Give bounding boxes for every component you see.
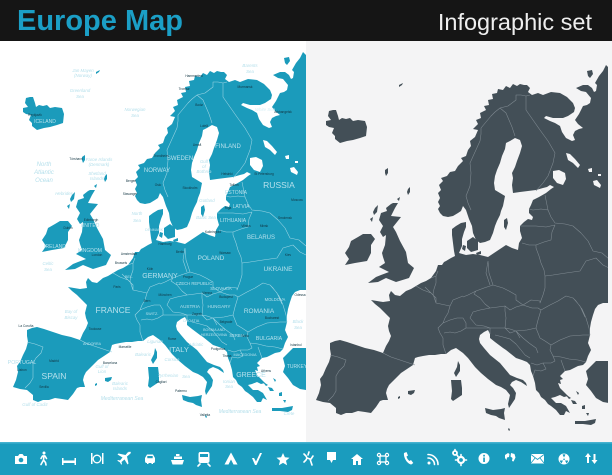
country labels: RUSSIA: [263, 180, 295, 190]
city labels: Athens: [261, 369, 271, 373]
icon: ship: [171, 454, 184, 464]
sea labels: [22, 63, 304, 416]
country labels: DENMARK: [145, 228, 164, 232]
sea labels: Sea: [133, 218, 141, 223]
country labels: ICELAND: [34, 119, 56, 125]
city labels: Smolensk: [278, 216, 292, 220]
city labels: Budapest: [219, 295, 233, 299]
icon: up and down arrows: [585, 453, 598, 464]
sea labels: Sea: [76, 94, 84, 99]
country labels: ITALY: [169, 345, 189, 354]
city labels: Amsterdam: [121, 252, 137, 256]
city labels: Toulouse: [89, 327, 102, 331]
country borders: [25, 82, 306, 388]
sea labels: North: [132, 211, 143, 216]
sea labels: Hebrides: [55, 191, 74, 196]
sea labels: Mediterranean Sea: [219, 409, 261, 415]
city labels: Brussels: [115, 261, 128, 265]
country labels: ROMANIA: [244, 308, 275, 315]
country labels: CROATIA: [183, 319, 200, 323]
icon: speech bubble: [327, 452, 336, 463]
city labels: Valletta: [200, 413, 210, 417]
country labels: IRELAND: [44, 244, 66, 250]
country labels: MACEDONIA: [234, 353, 257, 357]
sea labels: Gulf: [200, 159, 209, 164]
city labels: Reykjavik: [28, 113, 42, 117]
country labels: SLOVAKIA: [210, 286, 232, 291]
city labels: Belgrade: [220, 320, 233, 324]
sea labels: Sea: [182, 374, 190, 379]
sea labels: Islands: [90, 176, 105, 181]
country labels: NORWAY: [144, 168, 170, 174]
country labels: UKRAINE: [264, 266, 293, 273]
city labels: Tromsø: [179, 87, 189, 91]
country labels: HUNGARY: [208, 304, 230, 309]
city labels: Arkhangelsk: [274, 110, 292, 114]
city labels: Bern: [144, 299, 151, 303]
city labels: Helsinki: [221, 172, 233, 176]
sea labels: Shetland: [88, 171, 106, 176]
country labels: [8, 119, 308, 381]
country labels: ESTONIA: [225, 190, 248, 196]
city labels: Istanbul: [290, 343, 302, 347]
city labels: Kiev: [285, 253, 292, 257]
country labels: LITHUANIA: [220, 218, 247, 224]
sea labels: (Norway): [74, 73, 92, 78]
sea labels: Black: [293, 319, 304, 324]
sea labels: White Sea: [255, 107, 276, 112]
icon: check mark: [252, 453, 262, 465]
icon: command key: [377, 453, 389, 465]
icon: telephone: [404, 452, 413, 464]
icon bar: [0, 442, 612, 475]
country labels: BULGARIA: [256, 336, 283, 342]
city labels: London: [92, 253, 103, 257]
city labels: Cagliari: [156, 380, 167, 384]
city labels: Minsk: [260, 224, 269, 228]
country labels: SWEDEN: [167, 156, 193, 162]
city labels: Tórshavn: [69, 157, 83, 161]
header bar: [0, 0, 612, 41]
city labels: Luleå: [200, 124, 208, 128]
country labels: HERZEGOVINA: [201, 333, 228, 337]
sea labels: of: [202, 164, 207, 169]
city labels: Odessa: [294, 293, 306, 297]
sea labels: Faroe Islands: [86, 157, 113, 162]
city labels: Riga: [225, 206, 232, 210]
sea labels: Sea: [246, 69, 254, 74]
city labels: Stavanger: [123, 192, 138, 196]
land masses: [13, 52, 306, 418]
country borders: [328, 95, 609, 401]
icon: information: [478, 453, 490, 464]
icon: radiation: [558, 454, 570, 464]
subtitle: Infographic set: [438, 9, 592, 35]
sea labels: Gulf of Cadiz: [22, 402, 48, 407]
sea labels: Gulf of: [96, 364, 109, 369]
city labels: La Coruña: [19, 324, 34, 328]
sea labels: Lion: [98, 369, 107, 374]
country labels: UNITED: [81, 223, 100, 229]
city labels: Sevilla: [39, 385, 49, 389]
icon: deer: [304, 452, 313, 465]
icon: car: [145, 454, 155, 464]
city labels: Umeå: [193, 143, 201, 147]
city labels: Podgorica: [211, 347, 225, 351]
panel: right background: [306, 41, 612, 443]
sea labels: Sea: [44, 267, 52, 272]
sea labels: North: [37, 162, 52, 168]
icon: globe: [505, 453, 516, 462]
city labels: Warsaw: [219, 251, 231, 255]
country labels: SERBIA: [229, 333, 245, 338]
country labels: LATVIA: [233, 204, 250, 210]
sea labels: Balearic: [135, 352, 152, 357]
sea labels: Biscay: [65, 315, 78, 320]
country labels: POLAND: [198, 255, 225, 262]
city labels: Sofia: [241, 334, 249, 338]
country labels: BELARUS: [247, 235, 275, 241]
city labels: St Petersburg: [254, 172, 274, 176]
sea labels: Mediterranean Sea: [101, 396, 143, 402]
city labels: Bergen: [126, 179, 136, 183]
sea labels: Atlantic: [33, 170, 54, 176]
city labels: Tirana: [223, 354, 232, 358]
lakes: [553, 153, 601, 188]
city labels: Edinburgh: [84, 218, 98, 222]
city labels: Bodø: [195, 103, 203, 107]
city labels: Hamburg: [158, 242, 172, 246]
city labels: München: [158, 293, 172, 297]
city labels: Barcelona: [103, 361, 117, 365]
country labels: BEL.: [125, 275, 133, 279]
sea labels: Bay of: [65, 309, 78, 314]
country labels: MOLDOVA: [265, 297, 286, 302]
country labels: AUSTRIA: [180, 304, 201, 309]
sea labels: Adriatic: [188, 342, 204, 347]
country labels: FRANCE: [96, 305, 131, 315]
city labels: Lisbon: [17, 368, 27, 372]
sea labels: Ocean: [35, 178, 53, 184]
map: coloured labelled Europe: [8, 52, 308, 418]
city labels: Stockholm: [183, 186, 198, 190]
title: Europe Map: [17, 5, 183, 37]
icon: camera: [15, 454, 27, 464]
sea labels: Celtic: [43, 261, 54, 266]
icon: rss feed: [428, 454, 438, 464]
sea labels: Bothnia: [197, 169, 212, 174]
country labels: BOSNIA AND: [203, 328, 225, 332]
icon: bed: [62, 458, 76, 465]
sea labels: (Denmark): [89, 162, 110, 167]
sea labels: Balearic: [112, 381, 129, 386]
icon: airplane: [117, 452, 131, 465]
country labels: TURKEY: [287, 364, 308, 370]
icon: home: [351, 454, 363, 465]
sea labels: Ligurian: [147, 339, 163, 344]
city labels: Prague: [183, 275, 193, 279]
sea labels: Sea: [294, 325, 302, 330]
city labels: Murmansk: [238, 85, 253, 89]
icon: star: [276, 453, 290, 465]
sea labels: Jan Mayen: [71, 68, 94, 73]
sea labels: Corsica: [165, 357, 180, 362]
sea labels: Islands: [113, 386, 128, 391]
city labels: Vilnius: [241, 224, 251, 228]
city labels: Hammerfest: [185, 74, 203, 78]
city labels: Dublin: [63, 226, 73, 230]
country labels: FINLAND: [215, 144, 242, 150]
sea labels: Gotland: [199, 198, 215, 203]
country labels: SWITZ.: [146, 312, 158, 316]
city labels: Rome: [168, 337, 176, 341]
city labels: Zagreb: [192, 312, 202, 316]
sea labels: Norwegian: [124, 107, 146, 112]
country labels: ANDORRA: [83, 342, 102, 346]
sea labels: Sea: [131, 113, 139, 118]
sea labels: Baltic Sea: [196, 215, 216, 220]
city labels: Berlin: [176, 250, 184, 254]
sea labels: Sea: [225, 384, 233, 389]
sea labels: Crete: [284, 411, 295, 416]
icon: envelope: [531, 454, 544, 464]
country labels: GERMANY: [142, 273, 178, 280]
icon: gears: [453, 450, 466, 466]
sea labels: Barents: [242, 63, 258, 68]
icon: walking person: [41, 452, 46, 465]
city labels: Paris: [113, 285, 121, 289]
city labels: [17, 74, 306, 417]
lakes: [250, 140, 298, 175]
sea labels: Ionian: [223, 379, 236, 384]
icon: tent: [224, 452, 238, 464]
city labels: Marseille: [119, 345, 132, 349]
city labels: Palermo: [175, 389, 187, 393]
city labels: Kaliningrad: [205, 230, 221, 234]
sea labels: Greenland: [70, 88, 91, 93]
country labels: SPAIN: [42, 371, 66, 381]
city labels: Oslo: [155, 183, 162, 187]
land masses: [316, 65, 609, 431]
sea labels: Tyrrhenian: [158, 373, 179, 378]
map: dark silhouette Europe: [316, 65, 609, 431]
city labels: Madrid: [49, 359, 59, 363]
city labels: Bucharest: [265, 316, 279, 320]
country labels: KINGDOM: [78, 248, 102, 254]
icon: train: [198, 452, 210, 466]
city labels: Köln: [147, 267, 153, 271]
city labels: Trondheim: [153, 154, 169, 158]
country labels: GREECE: [236, 372, 266, 379]
country labels: CZECH REPUBLIC: [176, 281, 212, 286]
country labels: PORTUGAL: [8, 360, 36, 366]
city labels: Tallinn: [229, 183, 239, 187]
city labels: Moscow: [291, 198, 304, 202]
icon: knife and fork: [91, 453, 104, 464]
city labels: Vienna: [202, 291, 212, 295]
